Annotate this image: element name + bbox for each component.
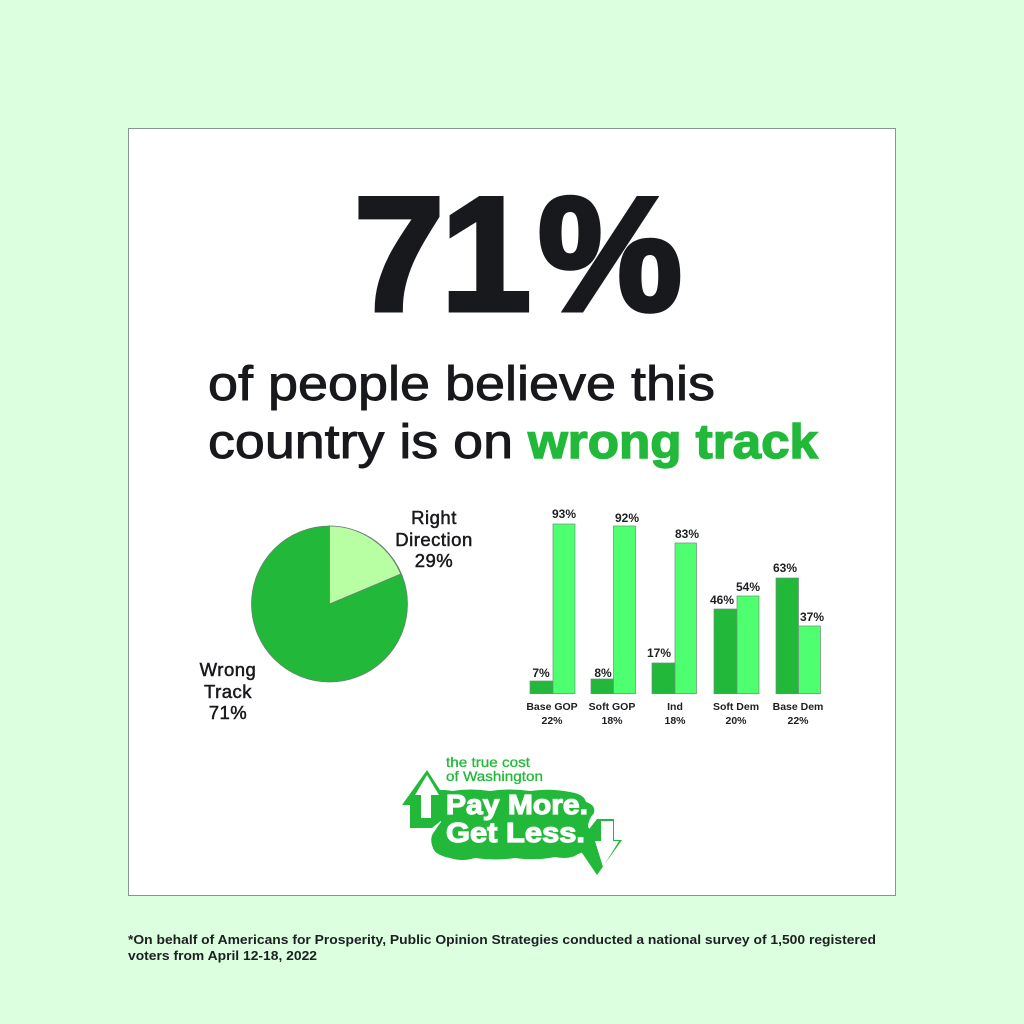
big number: 71%: 1 xyxy=(441,164,531,345)
bar category labels xyxy=(526,701,823,727)
headline highlight: wrong track: wrong track xyxy=(527,416,818,469)
pie label: right direction: Right xyxy=(411,507,457,528)
footnote: voters from April 12-18, 2022 xyxy=(128,948,317,963)
pie chart xyxy=(252,526,408,682)
logo tagline: of Washington xyxy=(446,768,543,784)
pie slice: right direction xyxy=(330,526,401,604)
bar category labels: 20% xyxy=(725,715,747,727)
logo wordmark: Get Less. xyxy=(446,817,585,848)
pie label: right direction: Direction xyxy=(395,529,473,550)
footnote xyxy=(128,932,876,963)
pie label: wrong track xyxy=(200,659,256,723)
bar value labels: 54% xyxy=(736,580,760,594)
bar category labels: Soft GOP xyxy=(589,701,635,713)
bars xyxy=(530,524,820,694)
bar value labels: 92% xyxy=(615,511,639,525)
pie label: right direction: 29% xyxy=(415,550,453,571)
headline xyxy=(208,358,818,469)
big number: 71%: % xyxy=(538,164,682,345)
bar category labels: 18% xyxy=(601,715,623,727)
panel: main card xyxy=(128,128,896,896)
bar value labels: 8% xyxy=(594,666,612,680)
headline: country is on xyxy=(208,416,513,469)
pie label: wrong track: Track xyxy=(204,681,252,702)
icon: down arrow xyxy=(580,819,622,875)
icon: up arrow xyxy=(402,770,446,828)
pie label: wrong track: 71% xyxy=(209,702,247,723)
logo: Pay More. Get Less. xyxy=(402,754,622,875)
logo wordmark xyxy=(446,789,588,848)
bar value labels: 63% xyxy=(773,561,797,575)
footnote: *On behalf of Americans for Prosperity, Public Opinion Strategies conducted a national survey of 1,500 registered xyxy=(128,932,876,947)
bar value labels: 83% xyxy=(675,527,699,541)
big number: 71%: 7 xyxy=(354,164,444,345)
bar category labels: 18% xyxy=(664,715,686,727)
bar category labels: Soft Dem xyxy=(713,701,759,713)
bar category labels: 22% xyxy=(541,715,563,727)
bar value labels: 93% xyxy=(552,507,576,521)
logo blob xyxy=(431,790,594,860)
logo tagline: the true cost xyxy=(446,754,530,770)
bar value labels: 37% xyxy=(800,610,824,624)
bar category labels: Base Dem xyxy=(773,701,823,713)
bar category labels: Base GOP xyxy=(526,701,578,713)
bar category labels: Ind xyxy=(667,701,683,713)
logo wordmark: Pay More. xyxy=(446,789,588,820)
pie label: right direction xyxy=(395,507,473,571)
logo tagline xyxy=(446,754,543,784)
bar value labels: 7% xyxy=(532,666,550,680)
bar value labels: 46% xyxy=(710,593,734,607)
bar value labels xyxy=(532,507,824,680)
pie label: wrong track: Wrong xyxy=(200,659,256,680)
bar value labels: 17% xyxy=(647,646,671,660)
headline: of people believe this xyxy=(208,358,715,411)
bar chart xyxy=(526,507,824,727)
bar category labels: 22% xyxy=(787,715,809,727)
